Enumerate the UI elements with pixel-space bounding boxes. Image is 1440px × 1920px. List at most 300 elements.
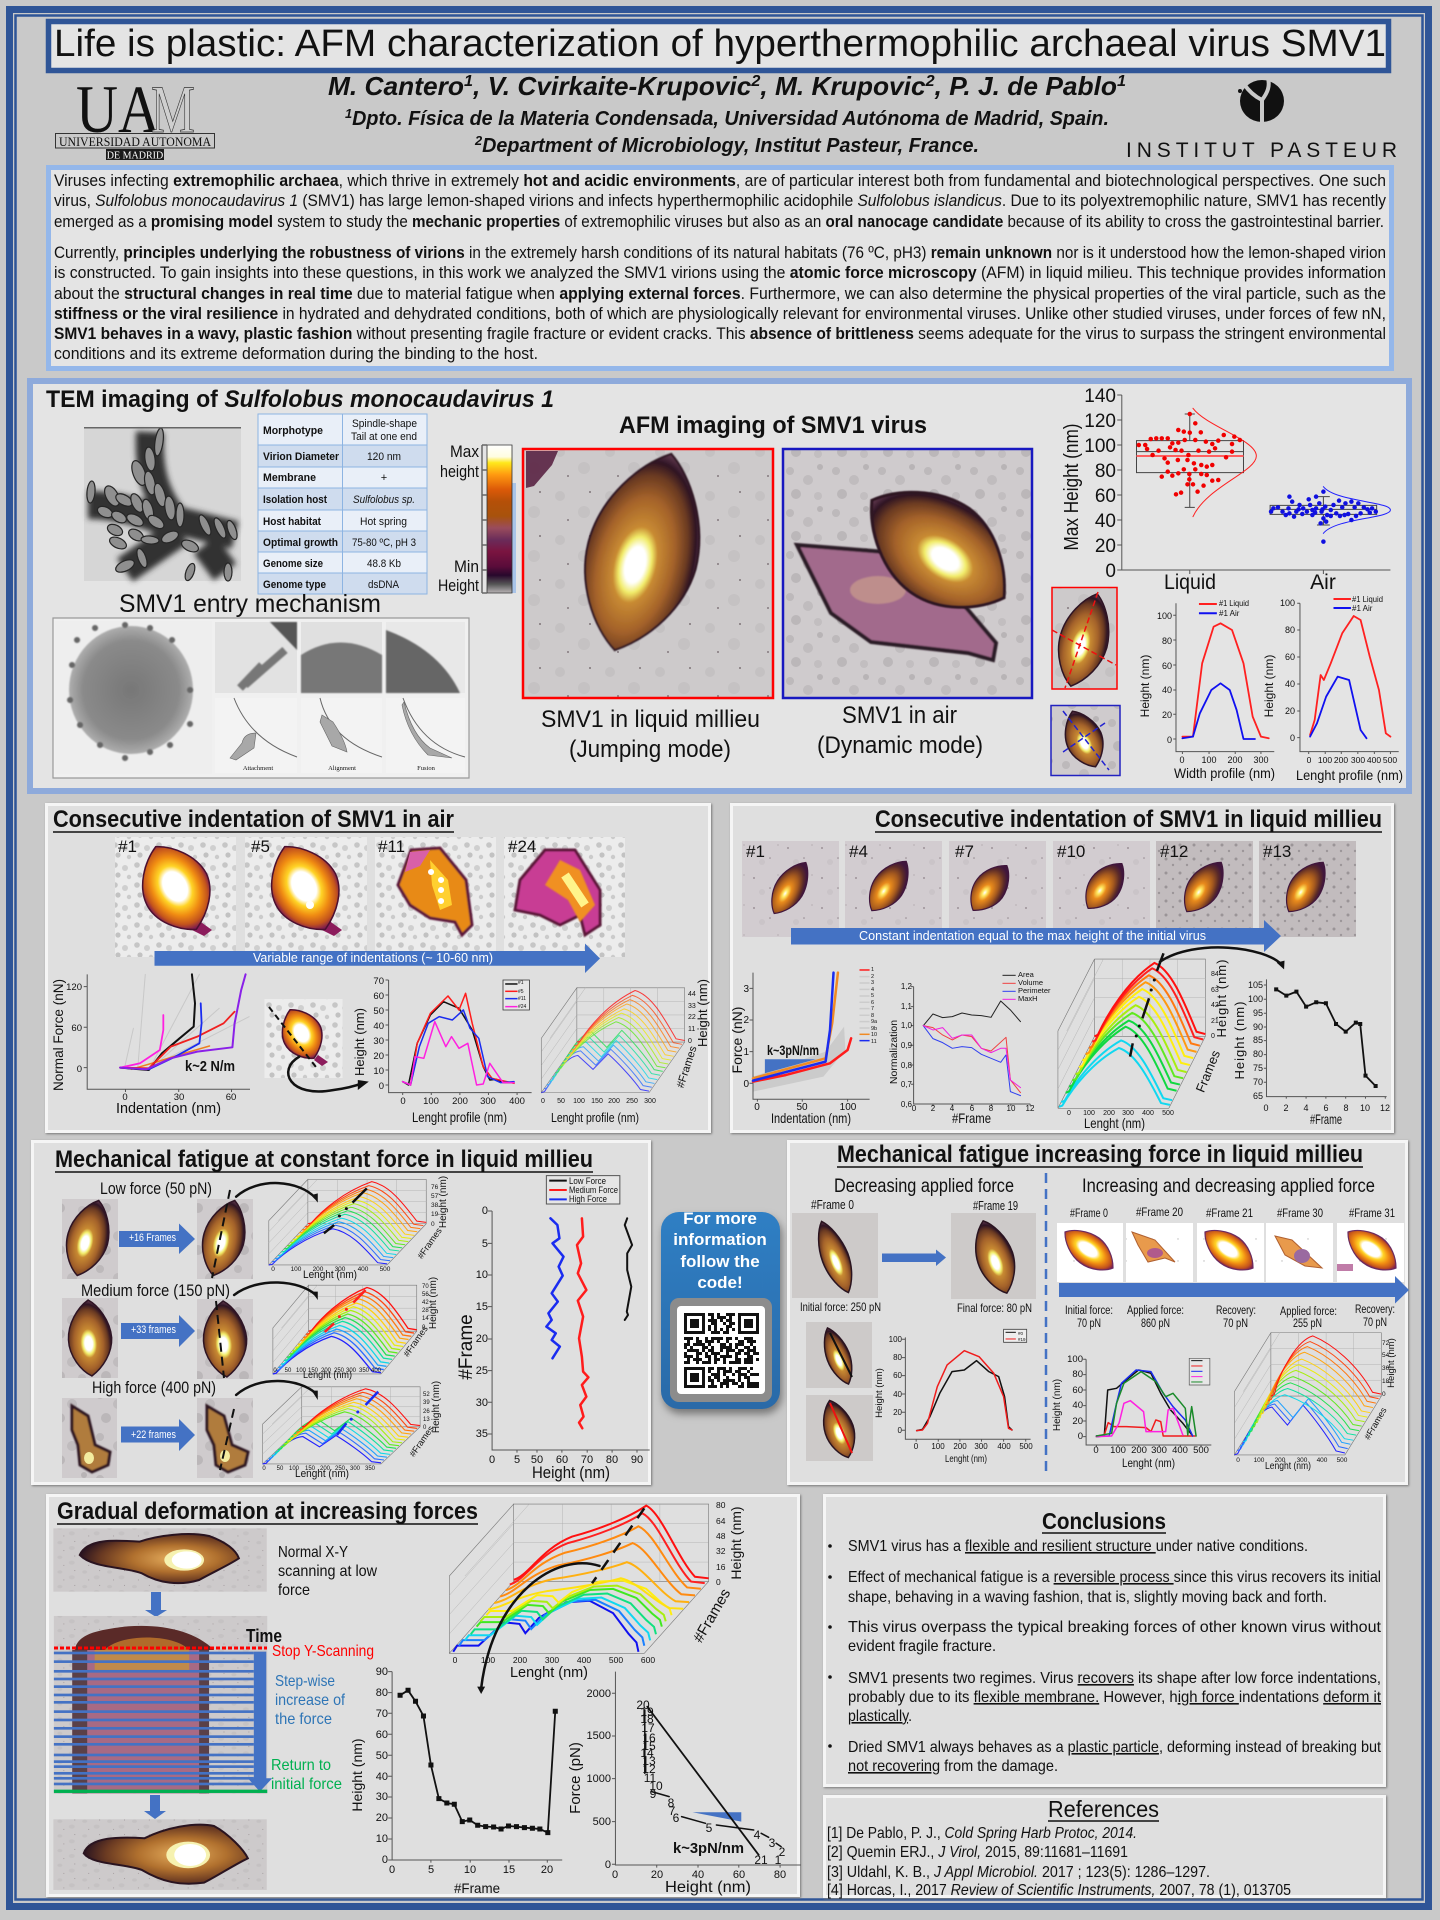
chart: height vs frame: 100 [1248,994,1263,1004]
thumbnail: profile air [1051,704,1120,776]
callout: QR code: For more [683,1209,757,1228]
thumbnail: frame 13 [1259,841,1356,937]
chart: max height distribution: 120 [1084,411,1116,432]
chart: 3D profile stack: 32 [716,1546,726,1556]
chart: force indentation liquid: 1 [743,1047,749,1058]
image strip: frames 0 20 21 30 31: #Frame 0 [1070,1206,1108,1220]
labels: scan steps: Step-wise [275,1673,335,1690]
chart: force indentation liquid: Indentation (nm) [771,1110,851,1126]
chart: increasing force profiles [1052,1354,1211,1470]
row: high force: 300 [350,1466,361,1472]
logo: UAM: UNIVERSIDAD AUTONOMA [59,134,212,149]
panel: introduction: emerged as a promising model system to study the mechanic properties of extremophilic viruses but also as an oral nanocage candidate because of its ability to cross the gastrointestinal barrier. [54,212,1384,231]
heading: Consecutive indentation of SMV1 in air [53,806,454,833]
chart: force indentation: 0 [77,1064,82,1075]
panel: introduction: Currently, principles underlying the robustness of virions in the extremely harsh conditions of its natural habitats (76 ºC, pH3) remain unknown nor is it understood how the lemon-shaped virion [54,243,1386,262]
chart: height profiles in air: 0 [400,1096,406,1107]
chart: max height distribution: 20 [1095,536,1116,557]
chart: 3D profile stack: 48 [716,1531,726,1541]
chart: max height distribution: 0 [1105,561,1116,582]
chart: max height distribution: 60 [1095,486,1116,507]
chart: decreasing force profile: #0 [1018,1331,1024,1336]
chart: height vs frame: 2 [1283,1103,1289,1113]
chart: height vs frame: 90 [1253,1022,1263,1032]
chart: decreasing force profile: Height (nm) [874,1368,885,1418]
chart: force indentation liquid: 50 [796,1102,808,1113]
chart: height vs frame: #Frame [454,1880,500,1896]
chart: 3D profile stack in liquid: 100 [1083,1110,1095,1117]
chart: height vs frame: #Frame [1310,1111,1342,1127]
conclusion bullets: SMV1 presents two regimes. Virus recovers its shape after low force indentations, [848,1670,1381,1687]
chart: normalization: 0,9 [901,1041,913,1050]
chart: height vs frame: 60 [376,1729,388,1741]
colour scale bar: height [440,462,479,481]
image strip: frames 0 20 21 30 31 [1055,1205,1406,1282]
chart: 3D profile stack in liquid: 21 [1211,1018,1219,1025]
reference list: [1] De Pablo, P. J., Cold Spring Harb Protoc, 2014. [827,1825,1137,1842]
row: high force: Lenght (nm) [295,1468,349,1480]
chart: length profile: 300 [1351,755,1365,765]
chart: increasing force profiles: 200 [1131,1445,1147,1456]
row: low force: #Frames [415,1225,444,1261]
panel: consecutive indentation in air [46,804,710,1132]
chart: force indentation liquid: 100 [840,1102,857,1113]
table: virus properties: Optimal growth [263,537,338,549]
row: medium force [62,1277,439,1381]
labels: applied forces: 860 pN [1141,1318,1170,1330]
thumbnail: frame 13: #13 [1263,842,1291,861]
chart: normalization: Normalization [888,1020,900,1084]
image strip: frames 0 20 21 30 31: #Frame 30 [1277,1206,1323,1220]
image strip: frames 0 20 21 30 31: #Frame 21 [1206,1206,1253,1220]
heading: TEM imaging: TEM imaging of Sulfolobus monocaudavirus 1 [46,386,554,413]
labels: applied forces: 70 pN [1223,1318,1248,1330]
chart: force indentation liquid: 7 [871,1006,874,1012]
chart: force indentation liquid: 3 [743,984,749,995]
labels: applied forces: 70 pN [1077,1318,1101,1330]
chart: max height distribution: 140 [1084,386,1116,407]
chart: normalization: Perimeter [1018,986,1051,995]
image: SMV1 in liquid [523,440,773,698]
chart: 3D profile stack in air: 300 [644,1098,656,1105]
chart: force vs height: 13 [642,1754,656,1768]
chart: force indentation: 30 [174,1092,184,1103]
chart: force vs height: 19 [640,1705,654,1719]
image: SMV1 in air [783,449,1034,698]
panel: introduction: is constructed. To gain insights into these questions, in this work we analyzed the SMV1 virions using the atomic force microscopy (AFM) in liquid milieu. This technique provides information [54,263,1386,282]
chart: height vs frame: 80 [376,1687,388,1699]
chart: normalization: 0 [912,1104,917,1113]
chart: height profiles in air: #5 [518,989,524,995]
row: high force: 250 [335,1466,346,1472]
labels: scan steps: Return to [271,1757,331,1774]
row: medium force: 350 [359,1368,370,1374]
chart: height vs frame: 80 [1253,1049,1263,1059]
row: high force: High force (400 pN) [92,1378,216,1397]
chart: max height distribution: 40 [1095,511,1116,532]
chart: force indentation liquid: k~3pN/nm [767,1042,819,1058]
chart: length profile: 400 [1367,755,1381,765]
chart: height profiles in air: 100 [423,1096,439,1107]
table: virus properties: dsDNA [368,579,400,591]
conclusion bullets [828,1538,1382,1775]
label: normal X-Y: Normal X-Y [278,1544,348,1561]
labels: scan steps [246,1626,374,1793]
labels: applied forces: Applied force: [1280,1306,1337,1318]
chart: 3D profile stack in liquid [1058,947,1285,1131]
image: entry mechanism micrographs [53,618,469,778]
row: high force: 13 [423,1417,430,1423]
labels: applied forces: Recovery: [1216,1305,1256,1317]
row: high force: 52 [423,1392,430,1398]
chart: height vs frame: 75 [1253,1063,1263,1073]
table: virus properties: Tail at one end [351,431,417,443]
chart: 3D profile stack: 100 [481,1655,495,1665]
chart: width profile: 300 [1253,755,1269,765]
affiliation 2: 2 [474,133,483,148]
row: low force [59,1176,449,1281]
chart: normalization: 6 [970,1104,975,1113]
chart: length profile: #1 Liquid [1352,595,1383,604]
row: low force: Lenght (nm) [303,1269,357,1281]
chart: height profiles in air: #24 [518,1004,527,1010]
chart: 3D profile stack in air: #Frames [675,1044,700,1090]
chart: increasing force profiles: 80 [1072,1369,1083,1380]
chart: height per frame by force: 15 [476,1301,488,1313]
table: virus properties [258,414,427,594]
table: virus properties: 120 nm [367,451,401,463]
label: SMV1 entry mechanism: SMV1 entry mechanism [119,590,381,618]
caption: liquid [541,706,760,763]
labels: applied forces: Recovery: [1355,1304,1395,1316]
chart: height per frame by force: 25 [476,1365,488,1377]
chart: force vs height: 4 [754,1828,761,1842]
chart: normalization: 1,1 [901,1002,913,1011]
chart: height per frame by force: Low Force [569,1176,606,1186]
thumbnail: frame 10: #10 [1057,842,1085,861]
heading: Gradual deformation at increasing forces [57,1498,478,1525]
chart: 3D profile stack in air: 0 [541,1098,545,1105]
row: high force [62,1378,442,1480]
chart: normalization: 1,2 [901,982,913,991]
chart: 3D profile stack in air: 50 [557,1098,565,1105]
chart: force indentation liquid: 3 [871,980,874,986]
chart: decreasing force profile: 60 [893,1371,903,1380]
table: virus properties: Spindle-shape [352,418,417,430]
row: low force: 0 [271,1266,275,1273]
image pair: frame 0 to 19 [792,1197,1036,1315]
chart: width profile: Width profile (nm) [1174,765,1275,781]
chart: 3D profile stack: 300 [545,1655,559,1665]
chart: normalization: 10 [1007,1104,1016,1113]
chart: decreasing force profile: 0 [898,1426,903,1435]
chart: force vs height: 17 [641,1721,655,1735]
arrow: down 1 [145,1592,167,1617]
panel: references [824,1796,1384,1899]
table: virus properties: Virion Diameter [263,451,340,463]
row: medium force: 0 [422,1325,426,1331]
row: medium force: 50 [285,1368,292,1374]
chart: 3D profile stack: 54 [1382,1352,1390,1359]
chart: force vs height: k~3pN/nm [673,1840,744,1857]
row: high force: 50 [277,1466,284,1472]
row: high force: 39 [423,1400,430,1406]
chart: height vs frame: 95 [1253,1008,1263,1018]
chart: height per frame by force: 10 [476,1269,488,1281]
chart: 3D profile stack: #Frames [690,1586,734,1646]
chart: height vs frame: 70 [376,1708,388,1720]
chart: force vs height: 12 [642,1762,656,1776]
panel: fatigue with increasing force [788,1141,1409,1484]
chart: height profiles in air: 40 [373,1021,384,1032]
row: low force: 76 [431,1184,439,1191]
image pair: frame 0 to 19: Initial force: 250 pN [800,1300,881,1314]
row: low force: 57 [431,1193,439,1200]
chart: increasing force profiles: 20 [1072,1416,1083,1427]
chart: height vs frame: 15 [503,1864,515,1876]
chart: increasing force profiles: 40 [1072,1400,1083,1411]
conclusion bullets: SMV1 virus has a flexible and resilient structure under native conditions. [848,1538,1308,1555]
chart: max height distribution [1061,386,1390,594]
chart: length profile: 0 [1290,733,1295,743]
chart: normalization [888,970,1051,1126]
labels: applied forces: Applied force: [1127,1305,1184,1317]
arrow: constant indentation: Constant indentation equal to the max height of the initial virus [859,928,1206,943]
row: medium force: 70 [422,1284,429,1290]
chart: force vs height: 8 [668,1796,675,1810]
chart: height per frame by force: Medium Force [569,1185,618,1195]
chart: force indentation: 0 [122,1092,128,1103]
chart: 3D profile stack: 0 [716,1577,721,1587]
chart: height vs frame: 10 [376,1833,388,1845]
chart: increasing force profiles: 100 [1067,1354,1083,1365]
row: low force: Height (nm) [438,1176,449,1228]
reference list: [3] Uldahl, K. B., J Appl Microbiol. 2017 ; 123(5): 1286–1297. [827,1864,1210,1881]
chart: height vs frame [1232,979,1390,1127]
chart: height per frame by force: 60 [556,1454,568,1466]
chart: height vs frame: 30 [376,1791,388,1803]
chart: decreasing force profile: 80 [893,1353,903,1362]
caption: air: SMV1 in air [842,702,957,729]
labels: scan steps: initial force [271,1776,342,1793]
chart: force indentation: k~2 N/m [185,1058,235,1075]
chart: 3D profile stack: 500 [609,1655,623,1665]
chart: 3D profile stack: 300 [1297,1457,1308,1464]
chart: force vs height: 5 [706,1821,713,1835]
row: high force: 350 [365,1466,376,1472]
chart: 3D profile stack: Height (nm) [1386,1338,1397,1388]
authors: 1 [464,73,473,90]
chart: increasing force profiles: 500 [1193,1445,1209,1456]
chart: height per frame by force: 0 [489,1454,495,1466]
chart: width profile: #1 Air [1219,609,1240,618]
table: virus properties: + [381,472,387,484]
subheading: increasing: Increasing and decreasing applied force [1082,1176,1375,1197]
chart: height vs frame: 20 [541,1864,553,1876]
chart: 3D profile stack: Lenght (nm) [1265,1461,1311,1472]
thumbnail: profile liquid [1049,588,1119,692]
chart: width profile: 60 [1162,661,1172,671]
chart: height vs frame: 4 [1303,1103,1309,1113]
table: virus properties: Sulfolobus sp. [353,494,415,506]
chart: force indentation liquid: 10 [871,1032,877,1038]
row: low force: 0 [431,1221,435,1228]
image: normal scan [53,1528,267,1592]
row: high force: 26 [423,1409,430,1415]
chart: force vs height: 0 [612,1869,618,1881]
chart: height vs frame: Height (nm) [349,1738,365,1812]
chart: 3D profile stack in air: 250 [626,1098,638,1105]
colour scale bar: Min [454,557,479,576]
chart: force indentation: 60 [71,1023,82,1034]
arrow: constant indentation [791,920,1281,952]
chart: 3D profile stack [1234,1333,1397,1472]
chart: normalization: 12 [1026,1104,1035,1113]
chart: force indentation liquid: 6 [871,1000,874,1006]
row: medium force: 300 [346,1368,357,1374]
chart: length profile: 40 [1285,679,1295,689]
row: high force: Height (nm) [431,1381,442,1433]
chart: force vs height: 15 [642,1739,656,1753]
chart: 3D profile stack: #Frames [1362,1405,1389,1441]
row: medium force: 400 [371,1368,382,1374]
table: virus properties: Membrane [263,472,316,484]
row: medium force: Height (nm) [428,1277,439,1329]
chart: height per frame by force: 35 [476,1428,488,1440]
thumbnail: frame 5: #5 [251,837,270,856]
chart: height vs frame: 10 [1360,1103,1370,1113]
chart: force vs height: 40 [692,1869,704,1881]
label: normal X-Y: force [278,1582,310,1599]
image pair: frame 0 to 19: #Frame 0 [811,1197,854,1212]
chart: 3D profile stack in liquid: Height (nm) [1214,959,1229,1037]
panel: introduction: conditions and its extreme deformation during the binding to the host. [54,344,538,363]
chart: force vs height: 60 [733,1869,745,1881]
chart: 3D profile stack: 64 [716,1516,726,1526]
heading: Consecutive indentation of SMV1 in liquid millieu [875,806,1382,833]
chart: height vs frame [349,1666,562,1896]
chart: force vs height: 10 [649,1779,663,1793]
chart: length profile: Height (nm) [1262,655,1276,717]
chart: height profiles in air: 200 [452,1096,468,1107]
image pair: frame 0 to 19: #Frame 19 [973,1198,1018,1213]
chart: normalization: 4 [950,1104,955,1113]
thumbnail: frame 19 profile [806,1395,873,1462]
chart: height vs frame: 20 [376,1812,388,1824]
thumbnail: frame 1: #1 [746,842,765,861]
chart: height vs frame: 70 [1253,1077,1263,1087]
chart: height vs frame: 12 [1380,1103,1390,1113]
chart: force indentation liquid: 4 [871,987,874,993]
thumbnail: frame 7: #7 [955,842,974,861]
row: medium force: 0 [273,1368,277,1374]
chart: max height distribution: Air [1310,571,1336,594]
chart: length profile: Lenght profile (nm) [1296,767,1403,783]
logo: Institut Pasteur: INSTITUT PASTEUR [1126,139,1397,162]
row: medium force: 14 [422,1316,429,1322]
colour scale bar: Max [450,442,479,461]
subheading: decreasing: Decreasing applied force [834,1176,1014,1197]
chart: height per frame by force: 20 [476,1333,488,1345]
chart: decreasing force profile: 100 [889,1335,903,1344]
chart: 3D profile stack: 200 [513,1655,527,1665]
chart: decreasing force profile: 500 [1019,1442,1033,1451]
chart: force vs height: 6 [673,1811,680,1825]
chart: width profile: 40 [1162,685,1172,695]
chart: length profile: 0 [1307,755,1312,765]
chart: max height distribution: Max Height (nm) [1061,424,1083,550]
chart: 3D profile stack: 72 [1382,1340,1390,1347]
row: low force: 300 [335,1266,346,1273]
colour scale bar [438,442,516,595]
chart: 3D profile stack in liquid: Lenght (nm) [1084,1115,1145,1131]
thumbnail: frame 0 profile [806,1322,872,1388]
caption: liquid: SMV1 in liquid millieu [541,706,760,733]
table: virus properties: Hot spring [360,516,407,528]
chart: force vs height: 9 [650,1787,657,1801]
chart: force vs height: 500 [593,1816,611,1828]
chart: height profiles in air: Height (nm) [352,1008,367,1076]
chart: 3D profile stack in liquid: Frames [1193,1048,1223,1095]
chart: 3D profile stack: 16 [716,1562,726,1572]
conclusion bullets: Effect of mechanical fatigue is a reversible process since this virus recovers its initial [848,1569,1381,1586]
chart: width profile: #1 Liquid [1219,599,1249,608]
thumbnail: frame 1: #1 [118,837,137,856]
chart: height profiles in air: 10 [373,1066,384,1077]
chart: height vs frame: 85 [1253,1035,1263,1045]
chart: force vs height: 1500 [587,1730,611,1742]
chart: force indentation: Normal Force (nN) [50,979,66,1091]
chart: height profiles in air: Lenght profile (nm) [412,1109,507,1125]
row: low force: +16 Frames [129,1232,176,1244]
conclusion bullets: probably due to its flexible membrane. However, high force indentations deform it [848,1689,1382,1706]
chart: increasing force profiles: 400 [1172,1445,1188,1456]
authors: 2 [750,73,760,90]
row: high force: #Frames [407,1423,436,1459]
chart: width profile: Height (nm) [1138,655,1152,717]
chart: height profiles in air: 60 [373,991,384,1002]
logo: UAM: UA [76,71,160,147]
chart: height per frame by force [456,1176,650,1482]
logo: Institut Pasteur [1126,78,1397,162]
reference list: [4] Horcas, I., 2017 Review of Scientific Instruments, 2007, 78 (1), 013705 [827,1882,1291,1899]
chart: width profile: 20 [1162,710,1172,720]
chart: 3D profile stack: 0 [453,1655,458,1665]
chart: 3D profile stack in liquid: 500 [1162,1110,1174,1117]
chart: width profile: 100 [1157,611,1172,621]
chart: force indentation liquid: 1 [871,967,874,973]
chart: width profile: 80 [1162,636,1172,646]
chart: length profile: 200 [1334,755,1348,765]
chart: normalization: 0,7 [901,1080,913,1089]
chart: force indentation liquid: 5 [871,993,874,999]
labels: applied forces [1065,1304,1395,1330]
callout: QR code [661,1209,780,1409]
row: medium force: 150 [308,1368,319,1374]
chart: force indentation liquid: 8 [871,1013,874,1019]
chart: 3D profile stack: 18 [1382,1378,1390,1385]
chart: height profiles in air: 300 [480,1096,496,1107]
chart: 3D profile stack in air: Lenght profile (nm) [551,1110,639,1125]
labels: applied forces: Initial force: [1065,1305,1113,1317]
chart: 3D profile stack in air: 11 [688,1026,695,1033]
panel: introduction: SMV1 behaves in a wavy, plastic fashion without presenting fragile fracture or evident cracks. This absence of brittleness seems adequate for the virus to surpass the stringent environmental [54,324,1386,343]
chart: force vs height: 11 [644,1771,657,1785]
chart: 3D profile stack in air: 44 [688,991,696,998]
chart: force vs height: 1000 [587,1773,611,1785]
chart: decreasing force profile: 100 [931,1442,945,1451]
caption: liquid: (Jumping mode) [569,736,731,763]
